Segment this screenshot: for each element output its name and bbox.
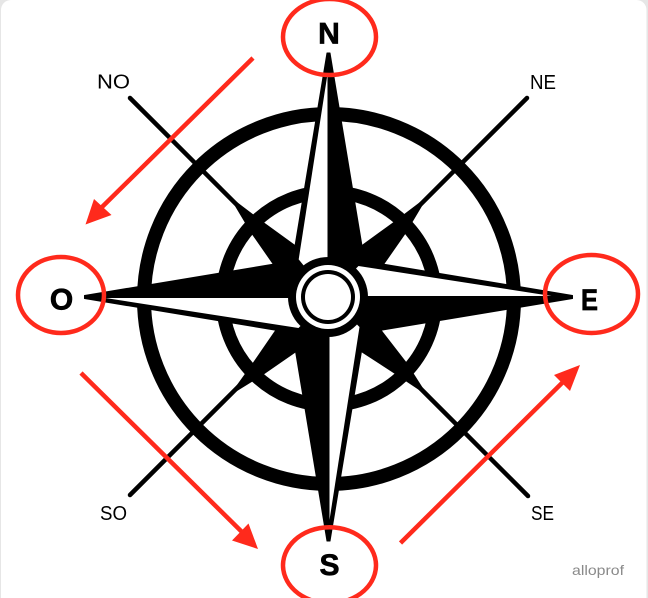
- arrow: west to south: [81, 373, 258, 549]
- outer ring: [144, 114, 514, 484]
- main point: east: [328, 260, 572, 334]
- diagonal star points: [229, 196, 428, 396]
- main point: south: [292, 297, 366, 541]
- label: SO: SO: [100, 503, 127, 525]
- red circle: S (cut off by the bottom edge): [281, 525, 378, 598]
- label: O: O: [50, 284, 73, 316]
- arrow: south to east: [400, 365, 580, 543]
- arrow: north to west: [86, 58, 253, 224]
- label: E: E: [581, 284, 598, 317]
- red circle: N: [283, 0, 376, 75]
- red circle: O: [18, 257, 104, 333]
- logo: alloprof: alloprof: [572, 562, 624, 578]
- central hub: [288, 257, 368, 337]
- compass rose: [84, 53, 572, 541]
- main point: west: [84, 260, 328, 334]
- inner ring: [222, 192, 436, 405]
- label: N: N: [318, 18, 340, 50]
- label: SE: SE: [531, 503, 554, 525]
- label: S: S: [319, 549, 340, 582]
- red circle: E: [545, 255, 638, 333]
- main point: north: [292, 53, 366, 297]
- label: NO: NO: [97, 72, 130, 94]
- label: NE: NE: [530, 72, 556, 94]
- diagonal spokes: [130, 98, 528, 496]
